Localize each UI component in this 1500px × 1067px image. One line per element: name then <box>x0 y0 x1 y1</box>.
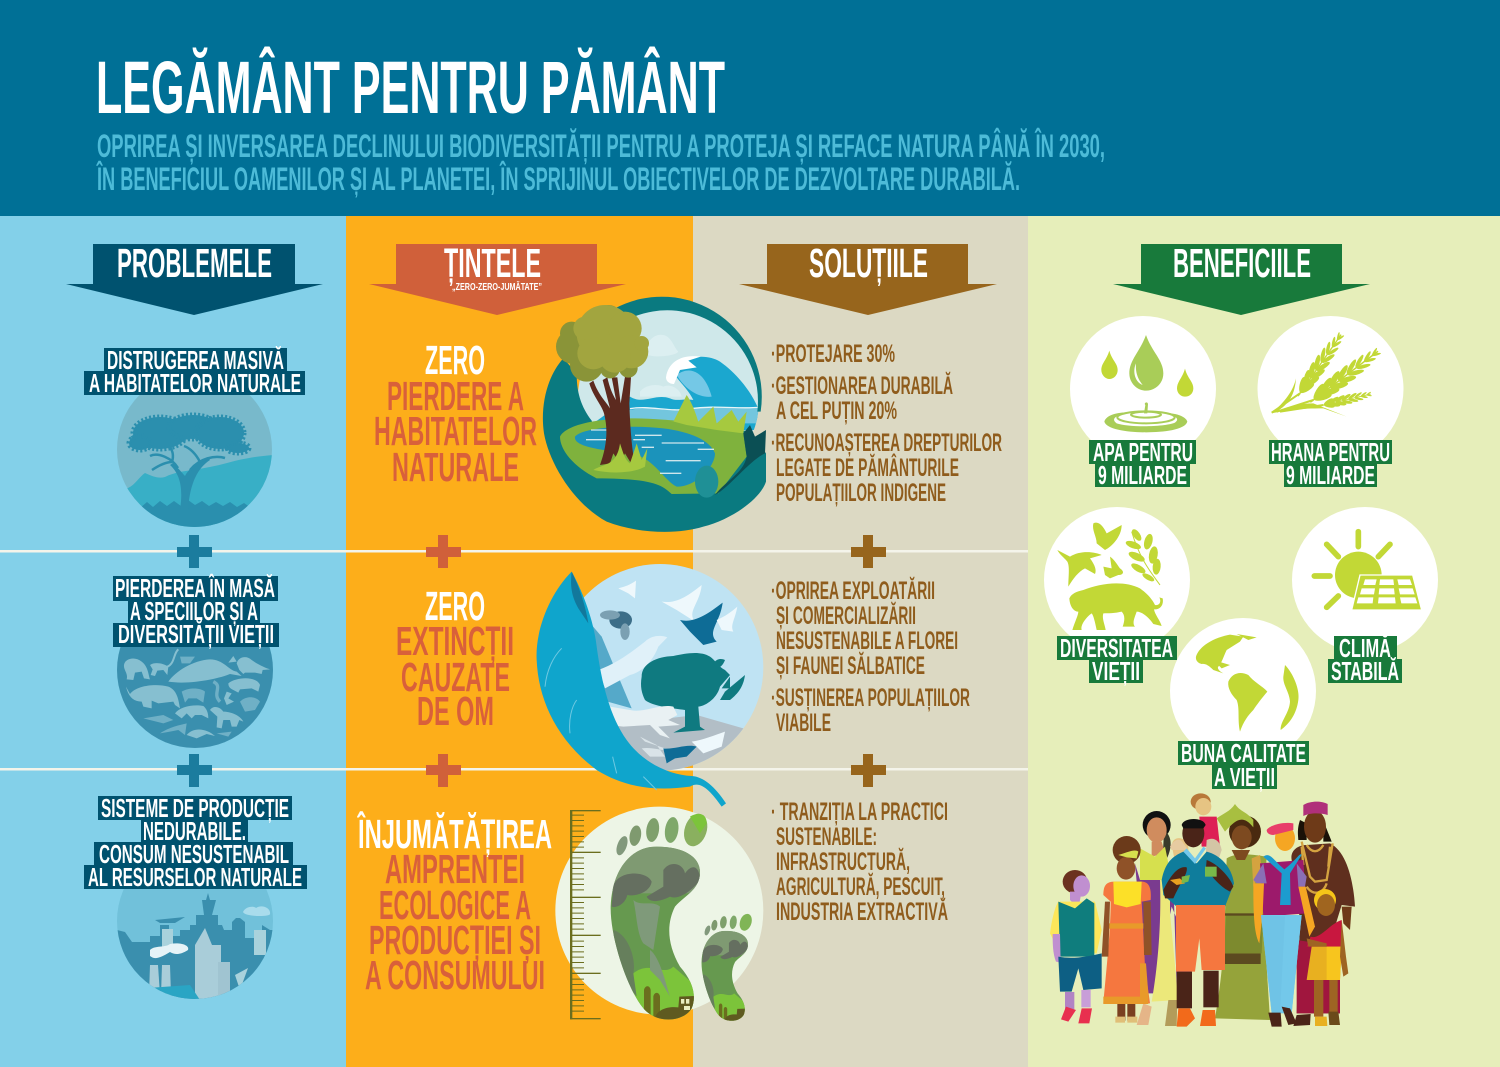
arrow heading: targets: „ZERO-ZERO-JUMĂTATE” <box>452 280 542 293</box>
text block: solutions 3: · TRANZIȚIA LA PRACTICI <box>771 798 948 826</box>
icon: plus row 1 targets <box>426 535 461 568</box>
icon: sun and solar panel <box>1292 507 1438 653</box>
icon: city and pollution circle <box>117 889 273 999</box>
text block: solutions 1: ·GESTIONAREA DURABILĂ <box>771 371 953 400</box>
label: problem 1 <box>84 345 305 398</box>
arrow heading: solutions: SOLUȚIILE <box>809 240 928 286</box>
text block: target 3: A CONSUMULUI <box>365 952 545 998</box>
label: problem 2: DIVERSITĂȚII VIEȚII <box>118 619 274 649</box>
arrow heading: solutions <box>739 240 997 315</box>
label: problem 3: NEDURABILE. <box>143 816 246 846</box>
title: LEGĂMÂNT PENTRU PĂMÂNT <box>96 46 725 129</box>
label: food: HRANA PENTRU <box>1271 437 1390 467</box>
label: problem 2: PIERDEREA ÎN MASĂ <box>115 573 275 603</box>
text block: solutions 2: ȘI COMERCIALIZĂRII <box>776 601 916 630</box>
text block: solutions 3 <box>771 798 948 926</box>
woman with braid <box>1135 811 1192 1026</box>
text block: target 3: ÎNJUMĂTĂȚIREA <box>357 811 552 857</box>
text block: target 2: EXTINCȚII <box>396 618 514 664</box>
icon: animals circle <box>117 592 273 748</box>
boy <box>1050 870 1102 1023</box>
text block: target 1: NATURALE <box>392 444 519 490</box>
icon: plus row 2 targets <box>426 754 461 787</box>
label: problem 3: SISTEME DE PRODUCȚIE <box>101 793 289 823</box>
icon: globe <box>1170 618 1316 764</box>
arrow heading: targets: ȚINTELE <box>444 240 541 286</box>
text block: target 3: ECOLOGICE A <box>379 882 531 928</box>
arrow heading: targets <box>369 240 626 315</box>
text block: target 3 <box>357 811 552 998</box>
icon: leaf with species <box>537 564 763 807</box>
text block: solutions 3: SUSTENABILE: <box>776 823 877 851</box>
label: quality of life: BUNA CALITATE <box>1181 738 1306 768</box>
text block: target 1: HABITATELOR <box>374 408 537 454</box>
label: problem 2: A SPECIILOR ȘI A <box>130 596 258 626</box>
text block: solutions 1: POPULAȚIILOR INDIGENE <box>776 479 946 507</box>
icon: plus row 1 problems <box>177 535 212 568</box>
label: problem 1: DISTRUGEREA MASIVĂ <box>107 345 284 375</box>
text block: target 2: ZERO <box>425 583 485 629</box>
text block: target 3: PRODUCȚIEI ȘI <box>369 917 541 963</box>
arrow heading: benefits: BENEFICIILE <box>1173 240 1311 286</box>
label: water <box>1089 437 1196 490</box>
icon: wildlife <box>1044 507 1190 653</box>
icon: plus row 2 problems <box>177 754 212 787</box>
panel: problems column background <box>0 216 346 1067</box>
text block: target 1: ZERO <box>425 337 485 383</box>
text block: solutions 3: INDUSTRIA EXTRACTIVĂ <box>776 897 948 926</box>
label: problem 3: CONSUM NESUSTENABIL <box>99 839 289 869</box>
text block: solutions 3: INFRASTRUCTURĂ, <box>776 847 910 876</box>
text block: solutions 2: ·OPRIREA EXPLOATĂRII <box>771 576 935 605</box>
label: climate <box>1328 633 1402 686</box>
text block: solutions 2: VIABILE <box>776 709 831 737</box>
text block: solutions 2 <box>771 576 970 737</box>
icon: water drops <box>1070 316 1216 462</box>
text block: solutions 1: ·RECUNOAȘTEREA DREPTURILOR <box>771 429 1002 457</box>
text block: target 2: DE OM <box>417 688 494 734</box>
arrow heading: benefits <box>1113 240 1370 315</box>
small child <box>1307 889 1348 1026</box>
label: problem 1: A HABITATELOR NATURALE <box>89 368 301 398</box>
label: problem 3 <box>84 793 307 892</box>
label: biodiversity: DIVERSITATEA <box>1060 633 1173 663</box>
label: food: 9 MILIARDE <box>1286 460 1375 490</box>
girl in orange dress <box>1102 836 1152 1023</box>
label: climate: CLIMĂ <box>1339 633 1391 663</box>
illustration: group of people <box>1050 793 1355 1027</box>
man with cap <box>1291 802 1355 1026</box>
label: biodiversity: VIEȚII <box>1092 656 1140 686</box>
man holding baby <box>1162 793 1234 1027</box>
label: biodiversity <box>1057 633 1177 686</box>
text block: solutions 3: AGRICULTURĂ, PESCUIT, <box>776 872 945 901</box>
label: food <box>1269 437 1392 490</box>
icon: plus row 2 solutions <box>851 754 886 787</box>
text block: target 3: AMPRENTEI <box>385 846 525 892</box>
text block: solutions 2: NESUSTENABILE A FLOREI <box>776 627 958 655</box>
label: problem 2 <box>113 573 279 649</box>
text block: solutions 1: LEGATE DE PĂMÂNTURILE <box>776 452 959 482</box>
icon: plus row 1 solutions <box>851 535 886 568</box>
text block: target 1 <box>374 337 537 490</box>
icon: savanna tree circle <box>117 395 272 527</box>
subtitle <box>96 128 1105 197</box>
panel: targets column background <box>346 216 693 1067</box>
panel: benefits column background <box>1028 216 1500 1067</box>
label: climate: STABILĂ <box>1331 656 1399 686</box>
text block: solutions 2: ȘI FAUNEI SĂLBATICE <box>776 651 925 680</box>
text block: solutions 1: ·PROTEJARE 30% <box>771 340 895 368</box>
text block: solutions 2: ·SUSȚINEREA POPULAȚIILOR <box>771 684 970 712</box>
label: quality of life <box>1178 738 1309 792</box>
arrow heading: problems <box>66 240 323 315</box>
text block: solutions 1: A CEL PUȚIN 20% <box>776 397 897 425</box>
label: problem 3: AL RESURSELOR NATURALE <box>88 862 302 892</box>
icon: hand holding nature <box>543 297 766 532</box>
label: water: 9 MILIARDE <box>1098 460 1187 490</box>
panel: header band <box>0 0 1500 216</box>
icon: footprints and ruler <box>555 807 763 1023</box>
text block: target 1: PIERDERE A <box>387 373 524 419</box>
label: water: APA PENTRU <box>1093 437 1193 467</box>
text block: target 2 <box>396 583 514 734</box>
text block: solutions 1 <box>771 340 1002 507</box>
arrow heading: problems: PROBLEMELE <box>117 240 272 286</box>
text block: target 2: CAUZATE <box>401 654 510 700</box>
label: quality of life: A VIEȚII <box>1214 762 1275 792</box>
icon: wheat <box>1258 316 1404 462</box>
panel: solutions column background <box>693 216 1028 1067</box>
woman with headwrap <box>1215 804 1270 1020</box>
man in pink cap <box>1253 823 1315 1027</box>
